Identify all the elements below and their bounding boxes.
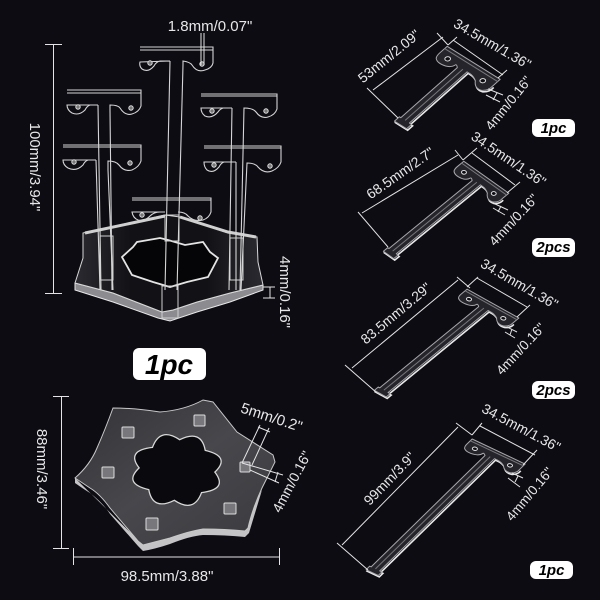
dimension: peg thickness: 4mm/0.16" <box>269 448 314 515</box>
dimensions for 83.5mm bar: 83.5mm/3.29" <box>357 279 434 347</box>
dimensions for 99mm bar: 34.5mm/1.36" <box>479 400 563 455</box>
dimensions for 53mm bar <box>355 15 535 133</box>
dimension: base thickness: 4mm/0.16" <box>276 256 293 328</box>
right lower T bar <box>204 146 281 290</box>
T bar 53mm <box>376 46 500 144</box>
dimensions for 68.5mm bar: 4mm/0.16" <box>486 191 541 249</box>
base hole <box>122 238 218 287</box>
dimensions for 83.5mm bar: 34.5mm/1.36" <box>478 255 561 312</box>
left lower T bar <box>63 145 141 290</box>
left upper T bar <box>67 90 141 290</box>
display base plate <box>75 215 263 321</box>
dimension: base width <box>73 548 280 585</box>
label: 1pc base: 1pc <box>145 349 194 380</box>
dimensions for 53mm bar: 4mm/0.16" <box>482 73 535 133</box>
right upper T bar <box>201 94 277 290</box>
pegs <box>102 415 250 530</box>
dimensions for 68.5mm bar: 68.5mm/2.7" <box>363 144 437 202</box>
dimension: slot thickness: 1.8mm/0.07" <box>168 18 252 35</box>
label: 1pc base <box>133 348 206 380</box>
label: 1pc: 1pc <box>541 120 567 137</box>
dimension: total height: 100mm/3.94" <box>26 123 43 211</box>
dimensions for 68.5mm bar <box>358 128 549 249</box>
T bar holes <box>72 61 272 220</box>
assembled display stand <box>63 47 281 321</box>
dimensions for 53mm bar: 34.5mm/1.36" <box>451 15 534 72</box>
dimensions for 99mm bar: 4mm/0.16" <box>503 464 556 524</box>
T bar 68.5mm <box>368 161 509 274</box>
dimension: peg thickness <box>242 448 314 515</box>
dimensions for 83.5mm bar <box>345 255 561 393</box>
back T bar <box>132 198 211 220</box>
dimensions for 53mm bar: 53mm/2.09" <box>355 26 423 86</box>
T bar 99mm <box>347 439 525 587</box>
dimensions for 99mm bar: 99mm/3.9" <box>360 449 419 508</box>
dimension: base depth <box>33 396 69 548</box>
dimension: total height <box>26 44 62 294</box>
label: 1pc <box>532 119 575 137</box>
stand sockets <box>100 215 243 318</box>
centre T bar <box>140 47 213 290</box>
label: 2pcs: 2pcs <box>535 382 571 399</box>
label: 1pc <box>530 561 573 579</box>
base top edge highlight <box>85 216 256 237</box>
dimension: base thickness <box>263 256 293 328</box>
dimension: slot thickness <box>168 18 252 65</box>
dimensions for 99mm bar <box>337 400 563 570</box>
label: 2pcs: 2pcs <box>535 239 571 256</box>
dimensions for 83.5mm bar: 4mm/0.16" <box>493 320 548 378</box>
flower cut-out <box>131 433 223 507</box>
dimension: peg width: 5mm/0.2" <box>238 400 304 436</box>
dimension: base depth: 88mm/3.46" <box>33 429 50 509</box>
flat base plate <box>75 400 275 551</box>
label: 1pc: 1pc <box>539 562 565 579</box>
dimension: peg width <box>238 400 304 465</box>
dimensions for 68.5mm bar: 34.5mm/1.36" <box>468 128 549 190</box>
dimension: base width: 98.5mm/3.88" <box>121 568 213 585</box>
T bar 83.5mm <box>356 289 519 411</box>
